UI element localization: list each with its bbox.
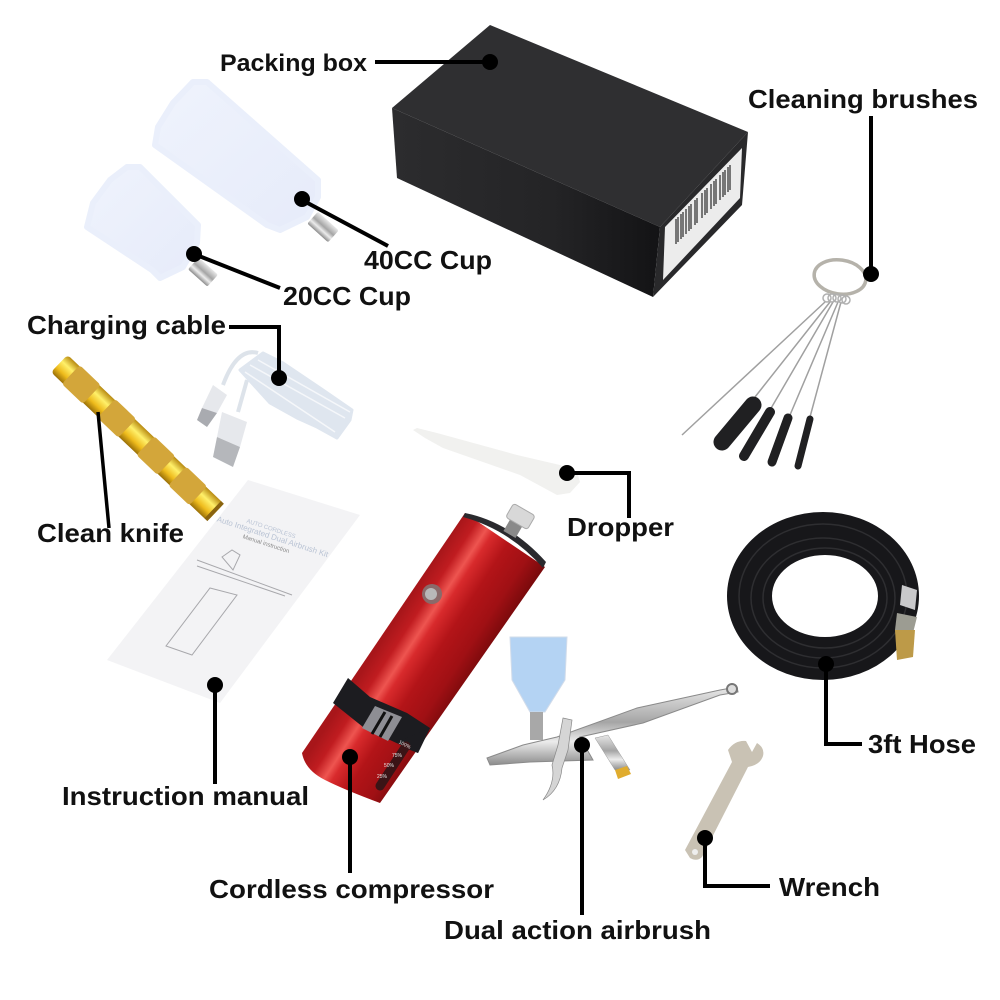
label: 40CC cup: 40CC Cup — [364, 245, 492, 275]
icon: cleaning brushes — [682, 257, 868, 466]
label: packing box: Packing box — [220, 50, 368, 77]
label: 20CC cup — [186, 246, 411, 311]
label: clean knife: Clean knife — [37, 518, 184, 548]
icon: cordless compressor — [302, 503, 546, 803]
label: dropper: Dropper — [567, 512, 674, 542]
label: 20CC cup: 20CC Cup — [283, 281, 411, 311]
icon: clean knife — [50, 354, 225, 522]
label: wrench: Wrench — [779, 872, 880, 902]
icon: wrench — [685, 741, 763, 860]
label: cordless compressor — [209, 749, 494, 904]
label: wrench — [697, 830, 880, 902]
icon: instruction manual: Manual instruction — [242, 534, 290, 555]
icon: instruction manual: AUTO CORDLESS — [245, 519, 296, 540]
icon: packing box — [392, 25, 748, 297]
label: clean knife — [37, 412, 184, 548]
label: dual action airbrush — [444, 737, 711, 945]
label: 3ft hose: 3ft Hose — [868, 729, 976, 759]
label: dual action airbrush: Dual action airbrush — [444, 915, 711, 945]
label: cleaning brushes — [748, 84, 978, 282]
label: cordless compressor: Cordless compressor — [209, 874, 494, 904]
icon: instruction manual: Auto Integrated Dual Airbrush Kit — [216, 515, 330, 559]
label: charging cable: Charging cable — [27, 310, 226, 340]
icon: dropper — [413, 428, 580, 495]
label: dropper — [559, 465, 674, 542]
icon: cordless compressor: 25% — [377, 774, 388, 780]
icon: 40CC cup — [155, 82, 339, 242]
icon: dual action airbrush — [487, 637, 738, 800]
icon: hose — [727, 512, 919, 680]
icon: cordless compressor: 50% — [384, 763, 395, 769]
icon: instruction manual — [107, 480, 360, 703]
icon: 20CC cup — [87, 167, 218, 287]
label: instruction manual — [62, 677, 309, 811]
icon: charging cable — [197, 352, 352, 467]
label: packing box — [220, 50, 498, 77]
label: 40CC cup — [294, 191, 492, 275]
label: charging cable — [27, 310, 287, 386]
icon: cordless compressor: 75% — [392, 753, 403, 759]
label: cleaning brushes: Cleaning brushes — [748, 84, 978, 114]
label: 3ft hose — [818, 656, 976, 759]
icon: cordless compressor: 100% — [397, 739, 412, 751]
label: instruction manual: Instruction manual — [62, 781, 309, 811]
